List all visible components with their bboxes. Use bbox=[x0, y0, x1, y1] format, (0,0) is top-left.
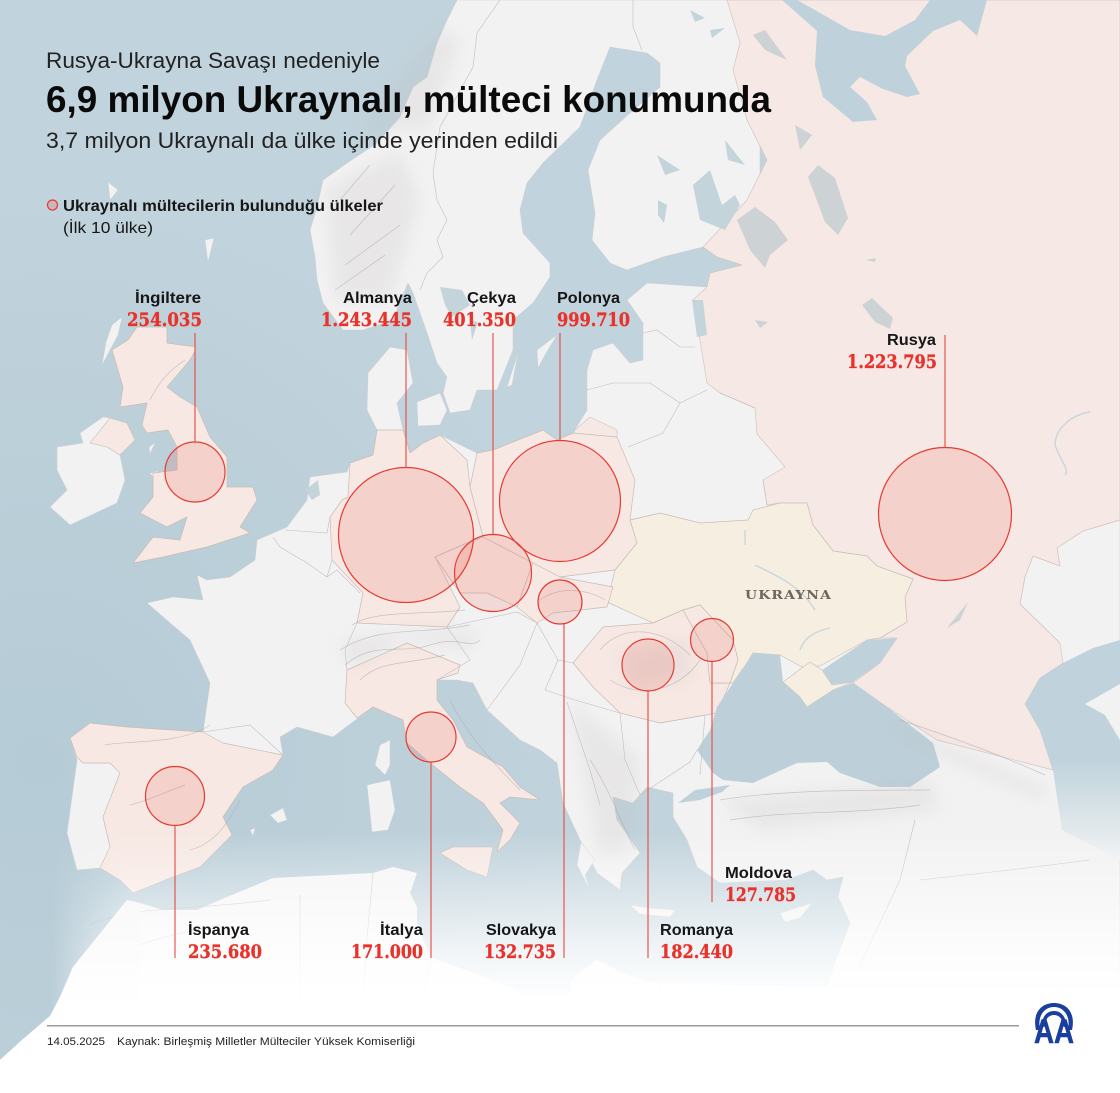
bottom fade to white bbox=[60, 848, 1120, 1093]
label: İspanya: 235.680 bbox=[188, 941, 262, 963]
country: Italy bbox=[345, 643, 540, 852]
label: Moldova bbox=[725, 865, 796, 906]
water: Russian lakes bbox=[737, 30, 968, 628]
footer source: Kaynak: Birleşmiş Milletler Mülteciler Yüksek Komiserliği bbox=[117, 1036, 415, 1048]
label: İtalya: İtalya bbox=[380, 921, 423, 939]
country: Kaliningrad bbox=[573, 417, 617, 437]
land: Kazakhstan edge bbox=[1020, 520, 1120, 643]
land: Scandinavia and Finland bbox=[310, 0, 760, 413]
land: Denmark islands bbox=[417, 393, 447, 426]
land: Mangyshlak bbox=[1085, 684, 1120, 740]
circle: Russia bbox=[878, 448, 1012, 580]
country: Russia bbox=[693, 0, 1120, 770]
label: Almanya: Almanya bbox=[343, 290, 412, 307]
circle: Germany bbox=[338, 468, 474, 602]
label: Romanya bbox=[660, 922, 733, 963]
label: İspanya: İspanya bbox=[188, 921, 249, 939]
circle: Romania bbox=[622, 639, 674, 691]
country: Romania bbox=[573, 610, 730, 723]
label: İspanya bbox=[188, 921, 262, 963]
footer date: 14.05.2025 bbox=[47, 1036, 105, 1048]
legend note: (İlk 10 ülke) bbox=[63, 218, 153, 237]
label: Almanya bbox=[321, 290, 412, 331]
country: Czechia bbox=[435, 537, 533, 607]
country: Germany bbox=[330, 430, 483, 627]
icon: AA logo: AA bbox=[1034, 1013, 1074, 1051]
header: main title: 6,9 milyon Ukraynalı, mülteci konumunda bbox=[46, 79, 771, 120]
label: Almanya: 1.243.445 bbox=[321, 309, 412, 331]
land: Morocco fade bbox=[0, 900, 140, 1093]
label: Moldova: 127.785 bbox=[725, 884, 796, 906]
label: İngiltere bbox=[127, 289, 202, 331]
country: Ukraine bbox=[607, 503, 913, 683]
country: Northern Ireland bbox=[90, 418, 135, 455]
legend marker bbox=[48, 200, 58, 210]
legend text: Ukraynalı mültecilerin bulunduğu ülkeler bbox=[63, 198, 383, 215]
circle: United Kingdom bbox=[165, 442, 225, 502]
country: Crimea bbox=[783, 662, 853, 707]
country: Moldova bbox=[683, 605, 738, 683]
label: Rusya: Rusya bbox=[887, 332, 936, 349]
label: Rusya bbox=[847, 332, 937, 373]
legend bbox=[48, 198, 383, 237]
label: Polonya: Polonya bbox=[557, 290, 620, 307]
country: United Kingdom bbox=[112, 327, 257, 563]
label: Slovakya bbox=[484, 922, 556, 963]
label: Slovakya: 132.735 bbox=[484, 941, 556, 963]
country: Poland bbox=[470, 430, 637, 577]
water: White Sea bbox=[782, 0, 987, 122]
land: Ireland bbox=[50, 417, 125, 525]
header: subtitle: 3,7 milyon Ukraynalı da ülke içinde yerinden edildi bbox=[46, 128, 558, 153]
label: İtalya bbox=[351, 921, 423, 963]
leader lines bbox=[175, 333, 945, 958]
circle: Poland bbox=[500, 440, 620, 562]
land: Continental Europe, Turkey and east bbox=[67, 265, 1120, 1093]
land: North Africa bbox=[0, 867, 900, 1093]
header: pre-title: Rusya-Ukrayna Savaşı nedeniyle bbox=[46, 48, 380, 73]
circle: Slovakia bbox=[538, 580, 582, 624]
land: Baltic islands bbox=[507, 335, 557, 387]
footer rule bbox=[47, 1025, 1019, 1026]
label: Çekya: 401.350 bbox=[443, 309, 516, 331]
country: Slovakia bbox=[517, 563, 613, 623]
label: İngiltere: İngiltere bbox=[135, 289, 201, 307]
country label: Ukrayna: UKRAYNA bbox=[745, 587, 832, 602]
water: Caspian Sea bbox=[1025, 640, 1120, 860]
label: İngiltere: 254.035 bbox=[127, 309, 202, 331]
label: İtalya: 171.000 bbox=[351, 941, 423, 963]
label: Polonya: 999.710 bbox=[557, 309, 630, 331]
borders and relief lines bbox=[203, 0, 1090, 1093]
water: Sea of Azov bbox=[822, 638, 897, 685]
water: rivers and inland lakes bbox=[745, 412, 1090, 650]
label: Çekya: Çekya bbox=[467, 290, 516, 307]
label: Romanya: 182.440 bbox=[660, 941, 733, 963]
label: Moldova: Moldova bbox=[725, 865, 792, 882]
circle: Czechia bbox=[454, 534, 532, 612]
icon: AA logo bbox=[1034, 1003, 1074, 1051]
label: Polonya bbox=[557, 290, 630, 331]
country: Spain bbox=[70, 723, 283, 893]
land: Mediterranean islands bbox=[102, 182, 812, 922]
circle: Spain bbox=[146, 766, 204, 826]
water: Black Sea bbox=[697, 653, 940, 787]
circle: Moldova bbox=[690, 618, 734, 662]
label: Çekya bbox=[443, 290, 516, 331]
label: Romanya: Romanya bbox=[660, 922, 733, 939]
country: Sicily bbox=[440, 847, 493, 877]
circle: Italy bbox=[406, 712, 456, 762]
label: Rusya: 1.223.795 bbox=[847, 351, 937, 373]
water: Sea of Marmara bbox=[678, 785, 730, 803]
relief shading bbox=[325, 30, 1050, 860]
label: Slovakya: Slovakya bbox=[486, 922, 556, 939]
